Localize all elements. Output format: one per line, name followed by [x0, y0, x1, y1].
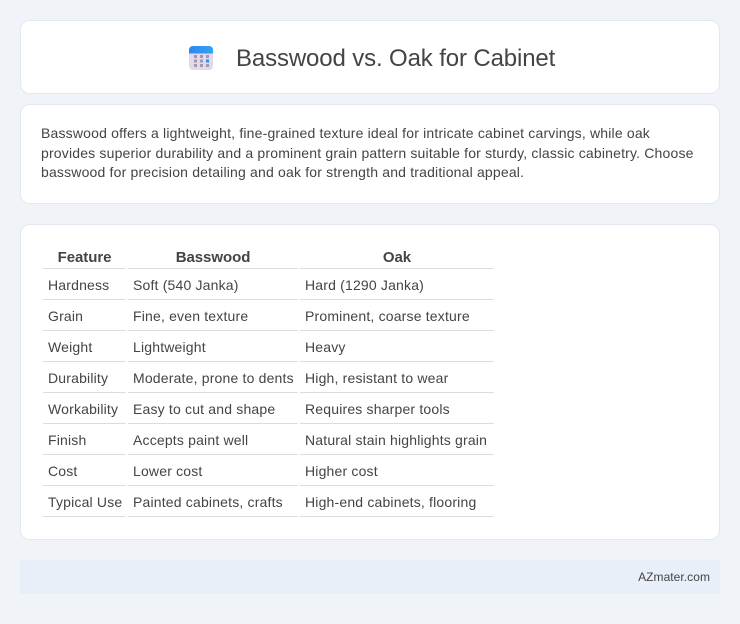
text block: summary: Basswood offers a lightweight, fine-grained texture ideal for intricate cabinet carvings, while oak [41, 125, 650, 141]
row: Typical Use: Typical Use [48, 494, 122, 510]
row: Hardness: Soft (540 Janka) [133, 277, 239, 293]
row: Workability [43, 401, 494, 424]
text block: summary: provides superior durability and a prominent grain pattern suitable for sturdy, classic cabinetry. Choose [41, 145, 694, 161]
panel: comparison table [20, 224, 720, 540]
row: Grain: Grain [48, 308, 83, 324]
row: Finish: Natural stain highlights grain [305, 432, 487, 448]
row: Cost [43, 463, 494, 486]
row: Finish [43, 432, 494, 455]
row: Durability: Durability [48, 370, 108, 386]
row: Weight: Heavy [305, 339, 346, 355]
title: Basswood vs. Oak for Cabinet [236, 45, 555, 72]
row: Workability: Easy to cut and shape [133, 401, 275, 417]
row: Typical Use [43, 494, 494, 517]
icon: calendar [189, 46, 213, 70]
row: Finish: Accepts paint well [133, 432, 248, 448]
row: Weight: Lightweight [133, 339, 206, 355]
row: Workability: Requires sharper tools [305, 401, 450, 417]
row: Workability: Workability [48, 401, 118, 417]
text block: summary [41, 125, 694, 180]
row: Cost: Lower cost [133, 463, 202, 479]
row: Durability [43, 370, 494, 393]
row: Weight [43, 339, 494, 362]
row: Hardness: Hard (1290 Janka) [305, 277, 424, 293]
row: Typical Use: Painted cabinets, crafts [133, 494, 283, 510]
table header [43, 249, 494, 269]
row: Grain: Fine, even texture [133, 308, 248, 324]
text block: summary: basswood for precision detailing and oak for strength and traditional appeal. [41, 164, 524, 180]
table header: Feature [58, 249, 111, 266]
row: Weight: Weight [48, 339, 92, 355]
row: Hardness [43, 277, 494, 300]
row: Hardness: Hardness [48, 277, 109, 293]
table header: Oak [383, 249, 411, 266]
row: Grain [43, 308, 494, 331]
footer [20, 560, 720, 594]
row: Grain: Prominent, coarse texture [305, 308, 470, 324]
panel: intro text [20, 104, 720, 204]
table header: Basswood [176, 249, 250, 266]
footer: AZmater.com [638, 570, 710, 584]
row: Finish: Finish [48, 432, 86, 448]
row: Cost: Higher cost [305, 463, 378, 479]
row: Durability: High, resistant to wear [305, 370, 448, 386]
row: Durability: Moderate, prone to dents [133, 370, 294, 386]
row: Typical Use: High-end cabinets, flooring [305, 494, 476, 510]
panel: title card [20, 20, 720, 94]
row: Cost: Cost [48, 463, 78, 479]
